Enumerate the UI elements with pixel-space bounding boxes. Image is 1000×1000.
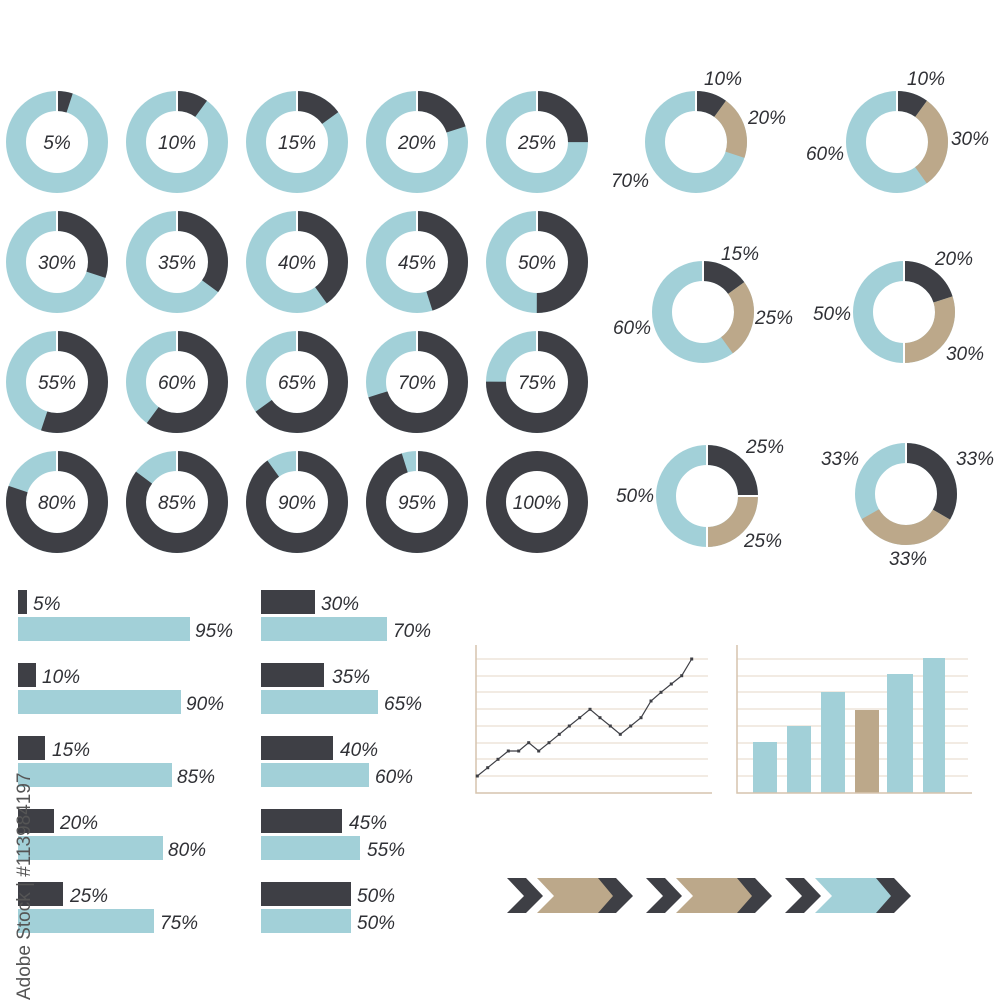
separators <box>57 90 906 548</box>
donut 15/25/60: 15% <box>721 244 759 265</box>
donut 60% <box>136 341 218 423</box>
donut 65% <box>256 341 338 423</box>
arrow group 3 <box>785 878 911 913</box>
donut 33/33/33: 33% <box>821 449 859 470</box>
donut 40%: 40% <box>278 253 316 274</box>
donut 85%: 85% <box>158 493 196 514</box>
donut 33/33/33: 33% <box>956 449 994 470</box>
horizontal bars left column: 15% <box>52 740 90 761</box>
horizontal bars left column: 75% <box>160 913 198 934</box>
donut 10% <box>136 101 218 183</box>
multi-segment donuts <box>611 69 994 570</box>
donut 40% <box>256 221 338 303</box>
donut 20/30/50: 50% <box>813 304 851 325</box>
donut 25/25/50 <box>616 437 784 552</box>
donut 35% <box>136 221 218 303</box>
horizontal bars right column: 50% <box>357 886 395 907</box>
watermark text: Adobe Stock | #113984197 <box>14 772 35 1000</box>
horizontal bars right column: 60% <box>375 767 413 788</box>
horizontal bars right column: 70% <box>393 621 431 642</box>
donut 65%: 65% <box>278 373 316 394</box>
donut 25%: 25% <box>517 133 556 154</box>
donut 10/30/60: 10% <box>907 69 945 90</box>
donut 35%: 35% <box>158 253 196 274</box>
donut 10/20/70: 10% <box>704 69 742 90</box>
donut 10/30/60: 60% <box>806 144 844 165</box>
bar chart <box>737 645 972 793</box>
horizontal bars right column: 65% <box>384 694 422 715</box>
donut 10/20/70 <box>611 69 786 192</box>
donut 95%: 95% <box>398 493 436 514</box>
donut 45% <box>376 221 458 303</box>
donut 50%: 50% <box>518 253 556 274</box>
horizontal bars left column: 90% <box>186 694 224 715</box>
donut 25/25/50: 25% <box>743 531 782 552</box>
donut 20% <box>376 101 458 183</box>
donut 15% <box>256 101 338 183</box>
donut 55% <box>16 341 98 423</box>
donut 100% <box>496 461 578 543</box>
donut 95% <box>376 461 458 543</box>
donut 25/25/50: 50% <box>616 486 654 507</box>
horizontal bars left column <box>18 590 233 934</box>
donut 15/25/60: 60% <box>613 318 651 339</box>
donut 45%: 45% <box>398 253 436 274</box>
donut 33/33/33 <box>821 449 994 570</box>
arrow group 1 <box>507 878 633 913</box>
horizontal bars right column: 40% <box>340 740 378 761</box>
donut 15%: 15% <box>278 133 316 154</box>
donut 25% <box>496 101 578 183</box>
donut 20%: 20% <box>397 133 436 154</box>
donut 75% <box>496 341 578 423</box>
donut 80%: 80% <box>38 493 76 514</box>
horizontal bars left column: 5% <box>33 594 61 615</box>
donut 20/30/50: 20% <box>934 249 973 270</box>
horizontal bars right column: 35% <box>332 667 370 688</box>
donut 25/25/50: 25% <box>745 437 784 458</box>
donut 5% <box>16 101 98 183</box>
horizontal bars left column: 80% <box>168 840 206 861</box>
horizontal bars right column: 30% <box>321 594 359 615</box>
donut 10/30/60 <box>806 69 989 183</box>
donut 70%: 70% <box>398 373 436 394</box>
donut 5%: 5% <box>43 133 71 154</box>
donut 80% <box>16 461 98 543</box>
line chart <box>476 645 712 793</box>
donut 15/25/60 <box>613 244 793 353</box>
donut 100%: 100% <box>513 493 561 514</box>
horizontal bars right column: 50% <box>357 913 395 934</box>
donut 55%: 55% <box>38 373 76 394</box>
arrow group 2 <box>646 878 772 913</box>
donut 10%: 10% <box>158 133 196 154</box>
donut 10/20/70: 70% <box>611 171 649 192</box>
donut 70% <box>376 341 458 423</box>
donut grid <box>16 101 578 543</box>
horizontal bars left column: 85% <box>177 767 215 788</box>
donut 90%: 90% <box>278 493 316 514</box>
horizontal bars left column: 25% <box>69 886 108 907</box>
donut 75%: 75% <box>518 373 556 394</box>
arrows <box>507 878 911 913</box>
donut 15/25/60: 25% <box>754 308 793 329</box>
donut 60%: 60% <box>158 373 196 394</box>
donut 20/30/50: 30% <box>946 344 984 365</box>
donut 33/33/33: 33% <box>889 549 927 570</box>
horizontal bars left column: 10% <box>42 667 80 688</box>
horizontal bars left column: 95% <box>195 621 233 642</box>
donut 10/30/60: 30% <box>951 129 989 150</box>
horizontal bars right column: 45% <box>349 813 387 834</box>
horizontal bars left column: 20% <box>59 813 98 834</box>
donut 30%: 30% <box>38 253 76 274</box>
donut 85% <box>136 461 218 543</box>
donut 20/30/50 <box>813 249 984 365</box>
donut 50% <box>496 221 578 303</box>
horizontal bars right column <box>261 590 431 934</box>
donut 90% <box>256 461 338 543</box>
horizontal bars right column: 55% <box>367 840 405 861</box>
donut 30% <box>16 221 98 303</box>
donut 10/20/70: 20% <box>747 108 786 129</box>
